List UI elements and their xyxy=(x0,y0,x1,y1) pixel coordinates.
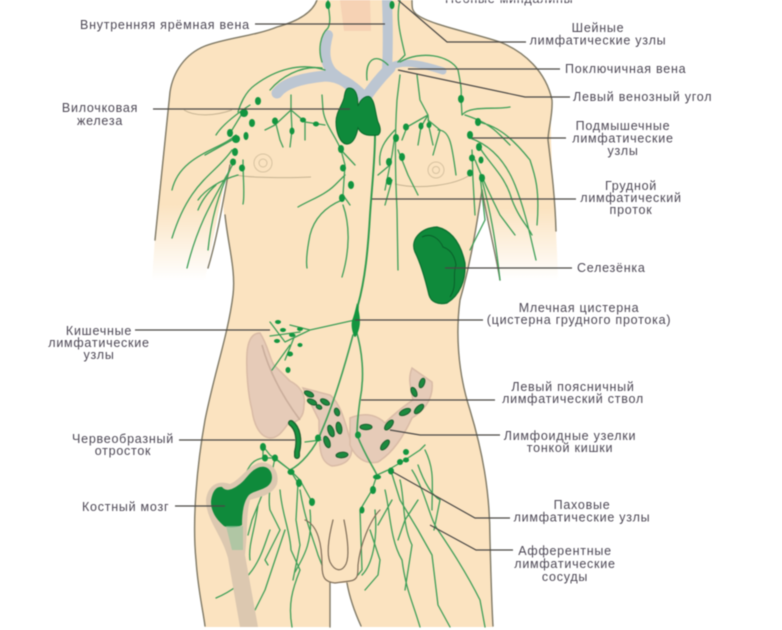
label: thymus: Вилочковая xyxy=(62,101,138,115)
label: lymphoid follicles: Лимфоидные узелки xyxy=(504,429,636,443)
intestine xyxy=(247,333,432,466)
label: internal jugular vein: Внутренняя ярёмная вена xyxy=(80,18,250,32)
label: axillary nodes: Подмышечные xyxy=(576,119,670,133)
label: afferent vessels: лимфатические xyxy=(514,557,616,571)
label: thymus: железа xyxy=(77,114,123,128)
label: cervical nodes: Шейные xyxy=(572,21,624,35)
body silhouette xyxy=(152,0,558,627)
leader lines xyxy=(135,0,576,550)
label: afferent vessels: Афферентные xyxy=(518,544,612,558)
label: inguinal nodes: лимфатические узлы xyxy=(514,510,650,524)
label: appendix: отросток xyxy=(95,444,151,458)
label: afferent vessels: сосуды xyxy=(542,570,588,584)
label: left venous angle: Левый венозный угол xyxy=(573,90,712,104)
label: left lumbar trunk: Левый поясничный xyxy=(511,380,635,394)
label: inguinal nodes: Паховые xyxy=(554,498,610,512)
inguinal right xyxy=(358,445,485,627)
veins xyxy=(277,0,443,100)
label: axillary nodes: лимфатические xyxy=(572,132,674,146)
label: intestinal nodes: узлы xyxy=(83,348,115,362)
label: lymphoid follicles: тонкой кишки xyxy=(527,441,613,455)
lymph nodes xyxy=(227,1,485,514)
appendix xyxy=(291,423,298,456)
label: cisterna chyli: (цистерна грудного протока) xyxy=(487,313,671,327)
neck and clavicle xyxy=(320,0,461,97)
label: cisterna chyli: Млечная цистерна xyxy=(519,301,639,315)
label: axillary nodes: узлы xyxy=(607,144,639,158)
inguinal left xyxy=(216,445,322,627)
genital outline xyxy=(305,510,380,583)
chest outlines xyxy=(184,110,470,187)
label: cervical nodes: лимфатические узлы xyxy=(530,34,666,48)
lymphoid follicles xyxy=(303,377,426,458)
cisterna chyli xyxy=(352,303,360,337)
thymus xyxy=(336,88,380,144)
label: thoracic duct: Грудной xyxy=(605,179,657,193)
lymph vessels xyxy=(172,0,538,627)
neck shading xyxy=(340,0,371,31)
label: intestinal nodes: Кишечные xyxy=(66,324,132,338)
left chest branches xyxy=(265,95,325,147)
thoracic duct xyxy=(357,135,375,320)
label: spleen: Селезёнка xyxy=(577,261,646,275)
label: left lumbar trunk: лимфатический ствол xyxy=(502,392,644,406)
femur and bone marrow xyxy=(206,463,278,627)
label: subclavian vein: Поключичная вена xyxy=(565,62,686,76)
label: appendix: Червеобразный xyxy=(72,432,174,446)
label: intestinal nodes: лимфатические xyxy=(48,336,150,350)
spleen xyxy=(414,227,465,304)
label: thoracic duct: лимфатический xyxy=(580,191,682,205)
label: thoracic duct: проток xyxy=(610,203,652,217)
label: bone marrow: Костный мозг xyxy=(82,500,169,514)
right chest branches xyxy=(378,75,418,270)
